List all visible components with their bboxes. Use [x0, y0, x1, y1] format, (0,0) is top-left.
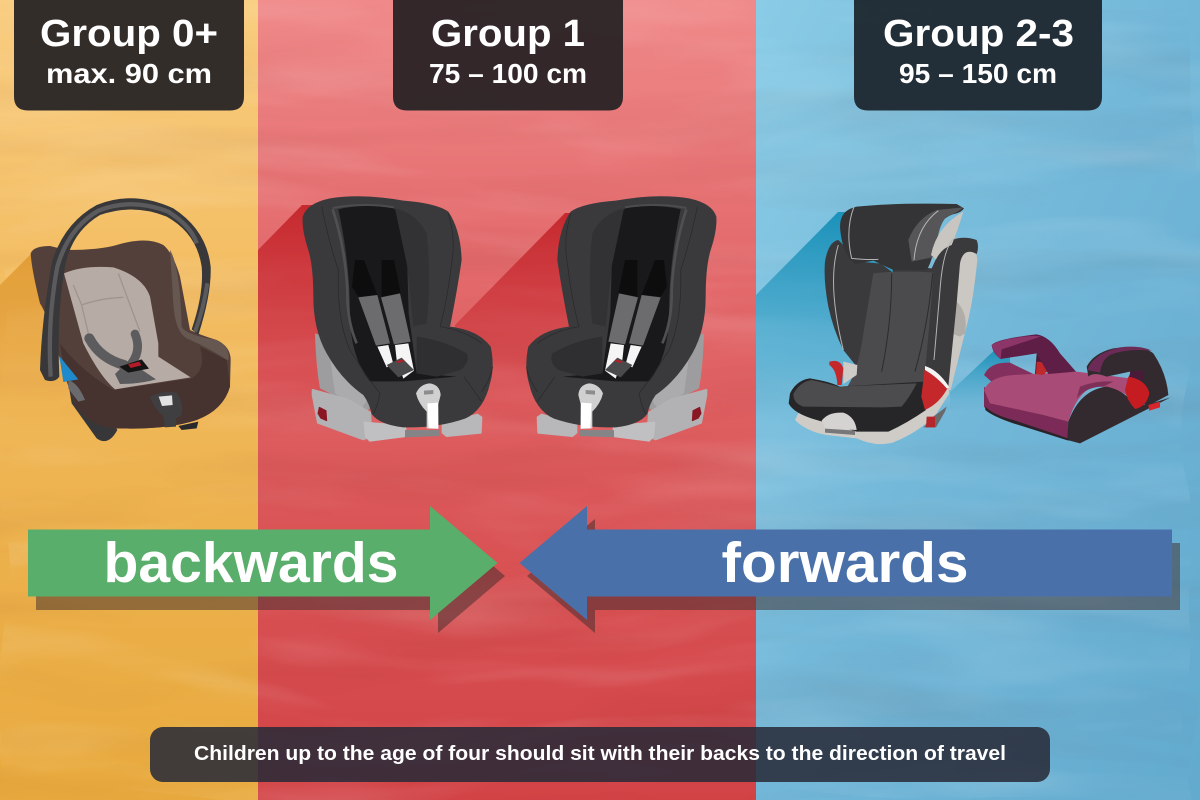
long shadow: group 1 seat right [455, 213, 600, 430]
icon: group 1 seat facing backwards [303, 196, 493, 441]
callout: rear-facing advice: Children up to the age of four should sit with their backs to the direction of travel [194, 743, 1006, 765]
panel: group 0+ background [0, 0, 258, 800]
heading: group 2-3: Group 2-3 [883, 13, 1074, 55]
heading: group 1: Group 1 [431, 13, 585, 55]
heading: group 1: 75 – 100 cm [429, 58, 587, 89]
heading: group 0+: max. 90 cm [46, 58, 212, 89]
icon: infant carrier seat [31, 198, 231, 441]
heading: group 2-3 [854, 0, 1102, 110]
heading: group 1 [393, 0, 623, 110]
heading: group 2-3: 95 – 150 cm [899, 58, 1057, 89]
arrow shadow: backwards [36, 519, 505, 633]
arrow shadow: forwards [527, 519, 1180, 633]
arrow: forwards [520, 506, 1172, 620]
long shadow: group 1 seat left [258, 205, 380, 440]
arrow: backwards: backwards [104, 531, 398, 595]
arrow: backwards [28, 506, 498, 620]
long shadow: booster cushion [950, 345, 1010, 410]
arrow: forwards: forwards [722, 531, 968, 595]
panel: group 1 background [258, 0, 756, 800]
callout: rear-facing advice [150, 727, 1050, 782]
heading: group 0+ [14, 0, 244, 110]
icon: booster cushion [984, 334, 1171, 443]
long shadow: high-back booster [756, 212, 880, 425]
icon: group 1 seat facing forwards [526, 196, 716, 441]
heading: group 0+: Group 0+ [40, 13, 218, 55]
long shadow: infant carrier [0, 250, 110, 430]
icon: high-back booster seat [789, 204, 978, 444]
panel: group 2-3 background [756, 0, 1200, 800]
